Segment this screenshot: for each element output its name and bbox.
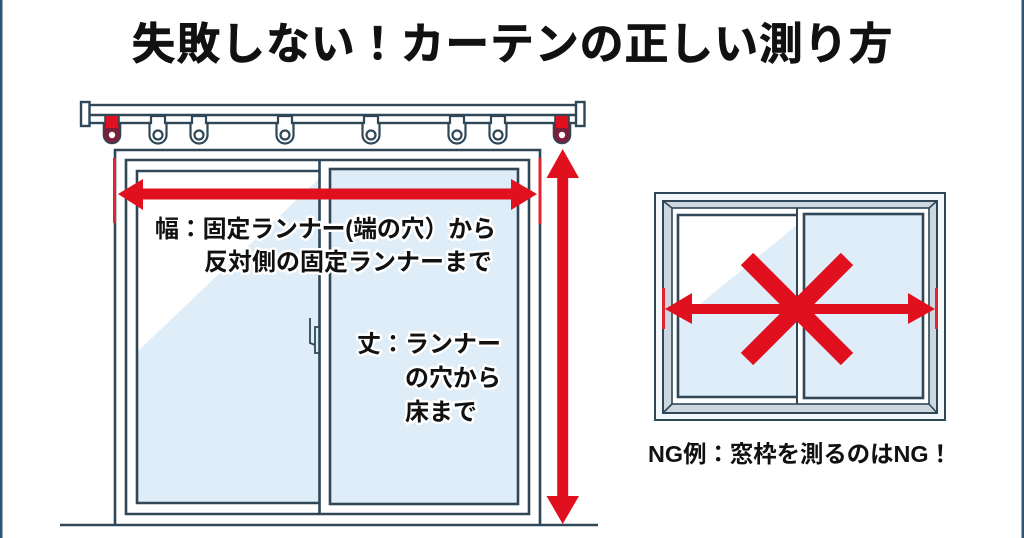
width label: 反対側の固定ランナーまで	[204, 249, 492, 276]
fixed runner right	[554, 116, 570, 144]
height label	[357, 331, 501, 426]
outer frame	[115, 150, 540, 525]
NG caption: NG例：窓枠を測るのはNG！	[648, 441, 952, 467]
runner	[362, 116, 380, 144]
runner	[190, 116, 208, 144]
left pane	[678, 215, 797, 397]
rail bar	[81, 102, 584, 126]
large sliding window	[60, 150, 598, 525]
cross mark	[747, 259, 847, 359]
right pane	[804, 214, 923, 398]
left glass pane	[137, 171, 320, 503]
floor line	[60, 524, 598, 526]
outer frame	[655, 193, 945, 420]
curtain rail with runners	[81, 102, 584, 144]
runner	[276, 116, 294, 144]
title: 失敗しない！カーテンの正しい測り方	[132, 20, 892, 69]
height label: 床まで	[405, 399, 477, 426]
right glass pane	[330, 169, 518, 504]
height label: の穴から	[405, 365, 501, 392]
height arrow	[546, 149, 579, 524]
width arrow	[113, 158, 542, 224]
bevelled frame	[663, 201, 937, 413]
height label: 丈：ランナー	[357, 331, 501, 358]
runner	[490, 116, 506, 144]
meeting rail	[796, 208, 798, 404]
fixed runner left	[104, 116, 120, 144]
width label	[155, 216, 496, 276]
NG width arrow	[662, 288, 938, 329]
runner	[150, 116, 166, 144]
NG window	[655, 193, 945, 420]
runner	[448, 116, 466, 144]
width label: 幅：固定ランナー(端の穴）から	[155, 216, 496, 243]
inner frame	[126, 160, 529, 514]
door handle	[310, 318, 319, 353]
